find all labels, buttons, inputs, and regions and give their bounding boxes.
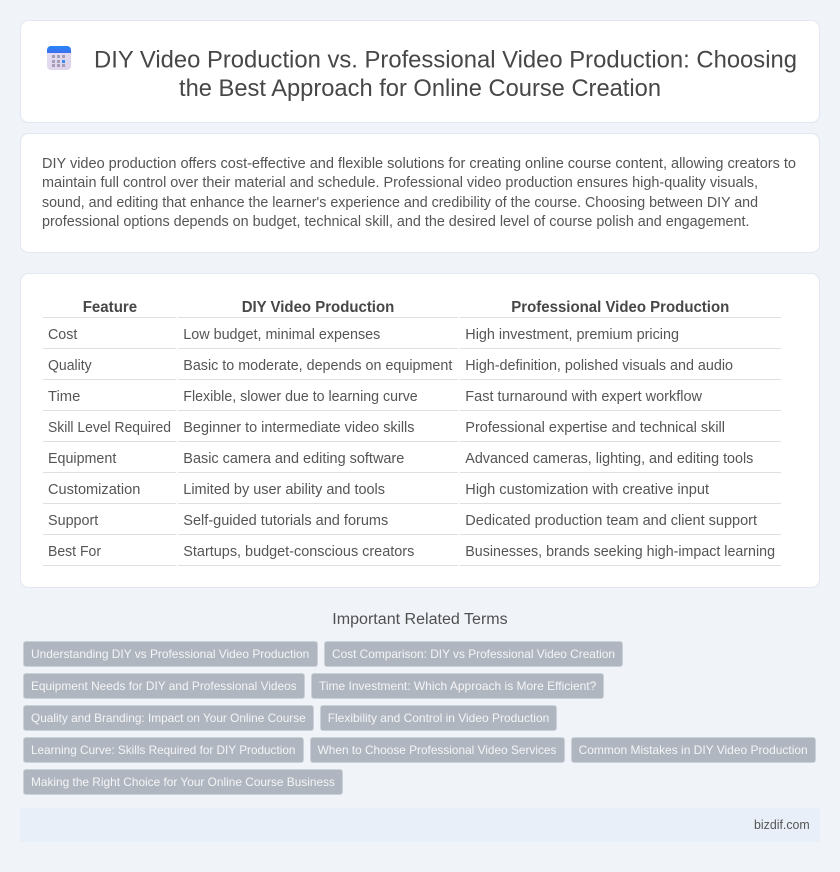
text block: introduction paragraph: professional options depends on budget, technical skill, and the desired level of course polish and engagement. bbox=[42, 214, 750, 230]
text block: introduction paragraph: maintain full control over their material and schedule. Professional video production ensures high-quality visuals, bbox=[42, 175, 758, 191]
table header: DIY Video Production bbox=[242, 299, 394, 316]
footer bbox=[20, 808, 820, 842]
tag: flexibility and control bbox=[320, 706, 556, 730]
row: cost bbox=[43, 327, 781, 349]
tag: learning curve: Learning Curve: Skills Required for DIY Production bbox=[31, 743, 295, 757]
table header bbox=[43, 299, 781, 318]
row: time bbox=[43, 389, 781, 411]
tag: quality and branding: Quality and Branding: Impact on Your Online Course bbox=[31, 711, 306, 725]
row: customization: Customization bbox=[48, 482, 140, 498]
panel: introduction bbox=[20, 134, 820, 252]
icon: calendar bbox=[47, 46, 71, 70]
row: time: Time bbox=[48, 389, 80, 405]
tag: understanding: Understanding DIY vs Professional Video Production bbox=[31, 647, 309, 661]
row: equipment: Equipment bbox=[48, 451, 116, 467]
row: quality: High-definition, polished visuals and audio bbox=[465, 358, 733, 374]
tag: understanding bbox=[24, 642, 318, 666]
tag: equipment needs bbox=[24, 674, 304, 698]
text block: introduction paragraph: DIY video production offers cost-effective and flexible solutions for creating online course content, allowing creators to bbox=[42, 156, 796, 172]
row: time: Fast turnaround with expert workflow bbox=[465, 389, 703, 405]
row: support: Self-guided tutorials and forums bbox=[183, 513, 388, 529]
tag: quality and branding bbox=[24, 706, 314, 730]
row: cost: Cost bbox=[48, 327, 77, 343]
row: quality: Basic to moderate, depends on equipment bbox=[183, 358, 452, 374]
row: time: Flexible, slower due to learning curve bbox=[183, 389, 418, 405]
row: cost: Low budget, minimal expenses bbox=[183, 327, 380, 343]
row: customization bbox=[43, 482, 781, 504]
table header: Professional Video Production bbox=[511, 299, 729, 316]
panel: comparison table bbox=[20, 274, 820, 588]
row: cost: High investment, premium pricing bbox=[465, 327, 679, 343]
footer source: bizdif.com bbox=[754, 817, 810, 832]
tag: when to choose: When to Choose Professional Video Services bbox=[318, 743, 556, 757]
tag: when to choose bbox=[310, 738, 564, 762]
tag: time investment bbox=[312, 674, 604, 698]
tag: cost comparison bbox=[324, 642, 622, 666]
row: skill level required bbox=[43, 420, 781, 442]
row: support: Support bbox=[48, 513, 98, 529]
row: equipment: Basic camera and editing software bbox=[183, 451, 404, 467]
row: customization: Limited by user ability and tools bbox=[183, 482, 385, 498]
row: customization: High customization with creative input bbox=[465, 482, 709, 498]
title: DIY Video Production vs. Professional Video Production: Choosing bbox=[94, 46, 797, 74]
row: skill level required: Skill Level Required bbox=[48, 420, 171, 436]
row: support: Dedicated production team and client support bbox=[465, 513, 757, 529]
tag: time investment: Time Investment: Which Approach is More Efficient? bbox=[319, 679, 597, 693]
table header: Feature bbox=[83, 299, 138, 316]
tag: common mistakes: Common Mistakes in DIY Video Production bbox=[579, 743, 808, 757]
row: best for: Best For bbox=[48, 544, 101, 560]
tag list: related terms bbox=[24, 642, 816, 794]
row: best for: Businesses, brands seeking high-impact learning bbox=[465, 544, 775, 560]
heading: important related terms: Important Related Terms bbox=[332, 611, 508, 628]
tag: learning curve bbox=[24, 738, 304, 762]
title bbox=[94, 46, 797, 102]
tag: flexibility and control: Flexibility and Control in Video Production bbox=[328, 711, 549, 725]
row: best for: Startups, budget-conscious creators bbox=[183, 544, 414, 560]
row: skill level required: Professional expertise and technical skill bbox=[465, 420, 725, 436]
text block: introduction paragraph bbox=[42, 156, 796, 230]
row: quality: Quality bbox=[48, 358, 92, 374]
tag: cost comparison: Cost Comparison: DIY vs Professional Video Creation bbox=[332, 647, 615, 661]
tag: equipment needs: Equipment Needs for DIY and Professional Videos bbox=[31, 679, 297, 693]
tag: making the right choice bbox=[24, 770, 342, 794]
row: quality bbox=[43, 358, 781, 380]
row: support bbox=[43, 513, 781, 535]
tag: making the right choice: Making the Right Choice for Your Online Course Business bbox=[31, 775, 335, 789]
row: skill level required: Beginner to intermediate video skills bbox=[183, 420, 414, 436]
row: best for bbox=[43, 544, 781, 566]
row: equipment: Advanced cameras, lighting, and editing tools bbox=[465, 451, 753, 467]
tag: common mistakes bbox=[572, 738, 816, 762]
title: the Best Approach for Online Course Creation bbox=[179, 75, 661, 102]
panel: header bbox=[20, 20, 820, 122]
row: equipment bbox=[43, 451, 781, 473]
text block: introduction paragraph: sound, and editing that enhance the learner's experience and credibility of the course. Choosing between DIY and bbox=[42, 195, 758, 211]
